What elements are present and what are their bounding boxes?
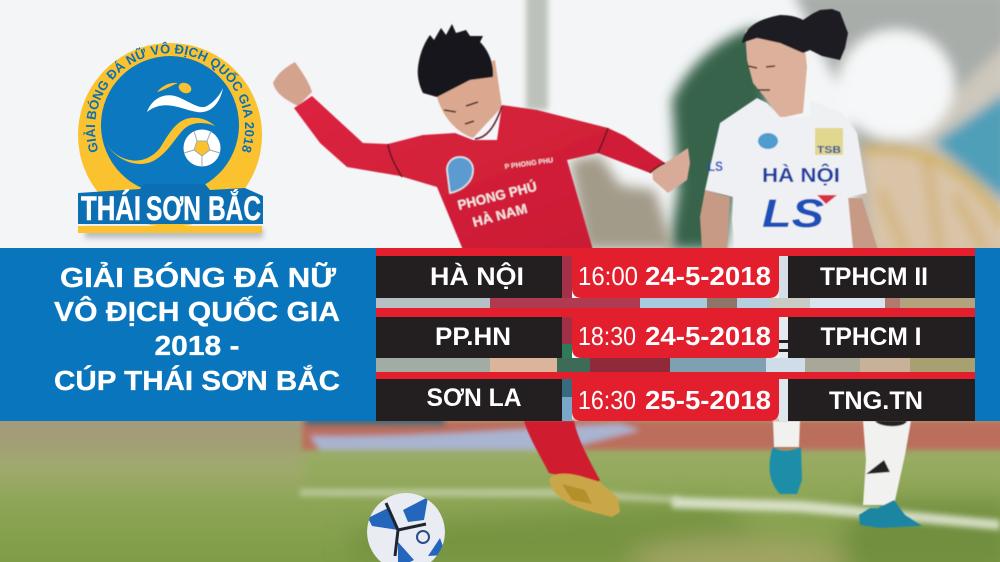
sponsor mark: P PHONG PHU: [504, 157, 554, 171]
fixture row 1: 24-5-2018: [645, 261, 771, 291]
fixture row 3: TNG.TN: [829, 387, 923, 415]
sleeve LS: LS: [708, 158, 723, 174]
banner text: [81, 190, 261, 228]
blue boots: [769, 447, 802, 494]
hand right: [652, 148, 690, 193]
chest logo: [447, 157, 473, 193]
fixture row 1: [376, 248, 975, 298]
photo background: running track and grass: [0, 405, 1000, 562]
tournament logo: [78, 42, 266, 241]
fixture row 3: 16:30: [578, 385, 636, 415]
title text: [54, 261, 340, 396]
banner text: THÁI: [81, 190, 141, 228]
neck and face: [745, 30, 807, 118]
adidas mark: [866, 460, 890, 474]
arm left: [700, 190, 730, 250]
white touchline: [672, 497, 1000, 530]
fixture row 2: 24-5-2018: [645, 321, 771, 351]
banner text: SƠN: [146, 190, 201, 228]
hand left: [273, 62, 312, 106]
jersey: [294, 96, 665, 250]
eyes and mouth: [444, 102, 478, 124]
eyes and mouth: [748, 66, 775, 90]
fixture row 2: 18:30: [578, 321, 636, 351]
gold boot: [549, 474, 620, 517]
sponsor LS: LS: [762, 192, 824, 236]
fixture row 3: SƠN LA: [426, 384, 522, 412]
title band left: [0, 248, 376, 421]
swimmer figure: [147, 81, 223, 112]
red player in Phong Phu Ha Nam jersey: HÀ NAM: [471, 201, 529, 230]
TSB badge: [815, 128, 843, 156]
fixture row 2: TPHCM I: [820, 323, 922, 351]
yellow ring: [78, 43, 262, 227]
fixture row 3: 25-5-2018: [645, 385, 771, 415]
jersey: [705, 98, 867, 250]
logo ball: [184, 130, 220, 167]
banner text: BẮC: [208, 190, 261, 228]
hair: [742, 9, 848, 60]
red sock: [524, 421, 600, 484]
glimpses of the photo between fixture rows: [376, 256, 975, 421]
red check: [817, 195, 837, 204]
fixture row 3: [376, 372, 975, 421]
fixture row 2: PP.HN: [435, 323, 511, 351]
title text: VÔ ĐỊCH QUỐC GIA: [54, 295, 340, 327]
red player in Phong Phu Ha Nam jersey: [273, 24, 690, 517]
blurred stand and roof at right: [792, 0, 1000, 260]
fixture row 1: TPHCM II: [820, 263, 928, 291]
yellow underline: [78, 226, 262, 233]
blurred tree: [668, 27, 770, 250]
pole behind player: [526, 0, 548, 110]
logo shadow: [85, 228, 263, 238]
blue edge band right: [975, 248, 1000, 421]
darker textured grass: [350, 500, 1000, 562]
face: [437, 60, 502, 138]
blurred building behind red player: [570, 155, 675, 250]
jersey sponsor text: PHONG PHÚ: [456, 179, 538, 213]
title text: CÚP THÁI SƠN BẮC: [54, 365, 340, 396]
team name: HÀ NỘI: [762, 163, 840, 187]
white player in Ha Noi jersey: [700, 9, 922, 528]
title text: 2018 -: [154, 330, 240, 361]
arm right: [848, 198, 878, 250]
ring text: GIẢI BÓNG ĐÁ NỮ VÔ ĐỊCH QUỐC GIA 2018: [84, 42, 254, 152]
fixture row 1: HÀ NỘI: [430, 261, 524, 291]
blue disc: [101, 56, 239, 194]
soccer ball: [367, 493, 446, 562]
name banner: [78, 184, 263, 224]
fixture row 1: 16:00: [578, 261, 638, 291]
jersey crest: [758, 133, 778, 149]
yellow swoosh: [105, 118, 215, 164]
TSB badge: TSB: [817, 145, 841, 156]
hair: [418, 24, 493, 97]
title text: GIẢI BÓNG ĐÁ NỮ: [60, 261, 337, 293]
socks: [773, 421, 800, 447]
fixture row 2: [376, 308, 975, 358]
